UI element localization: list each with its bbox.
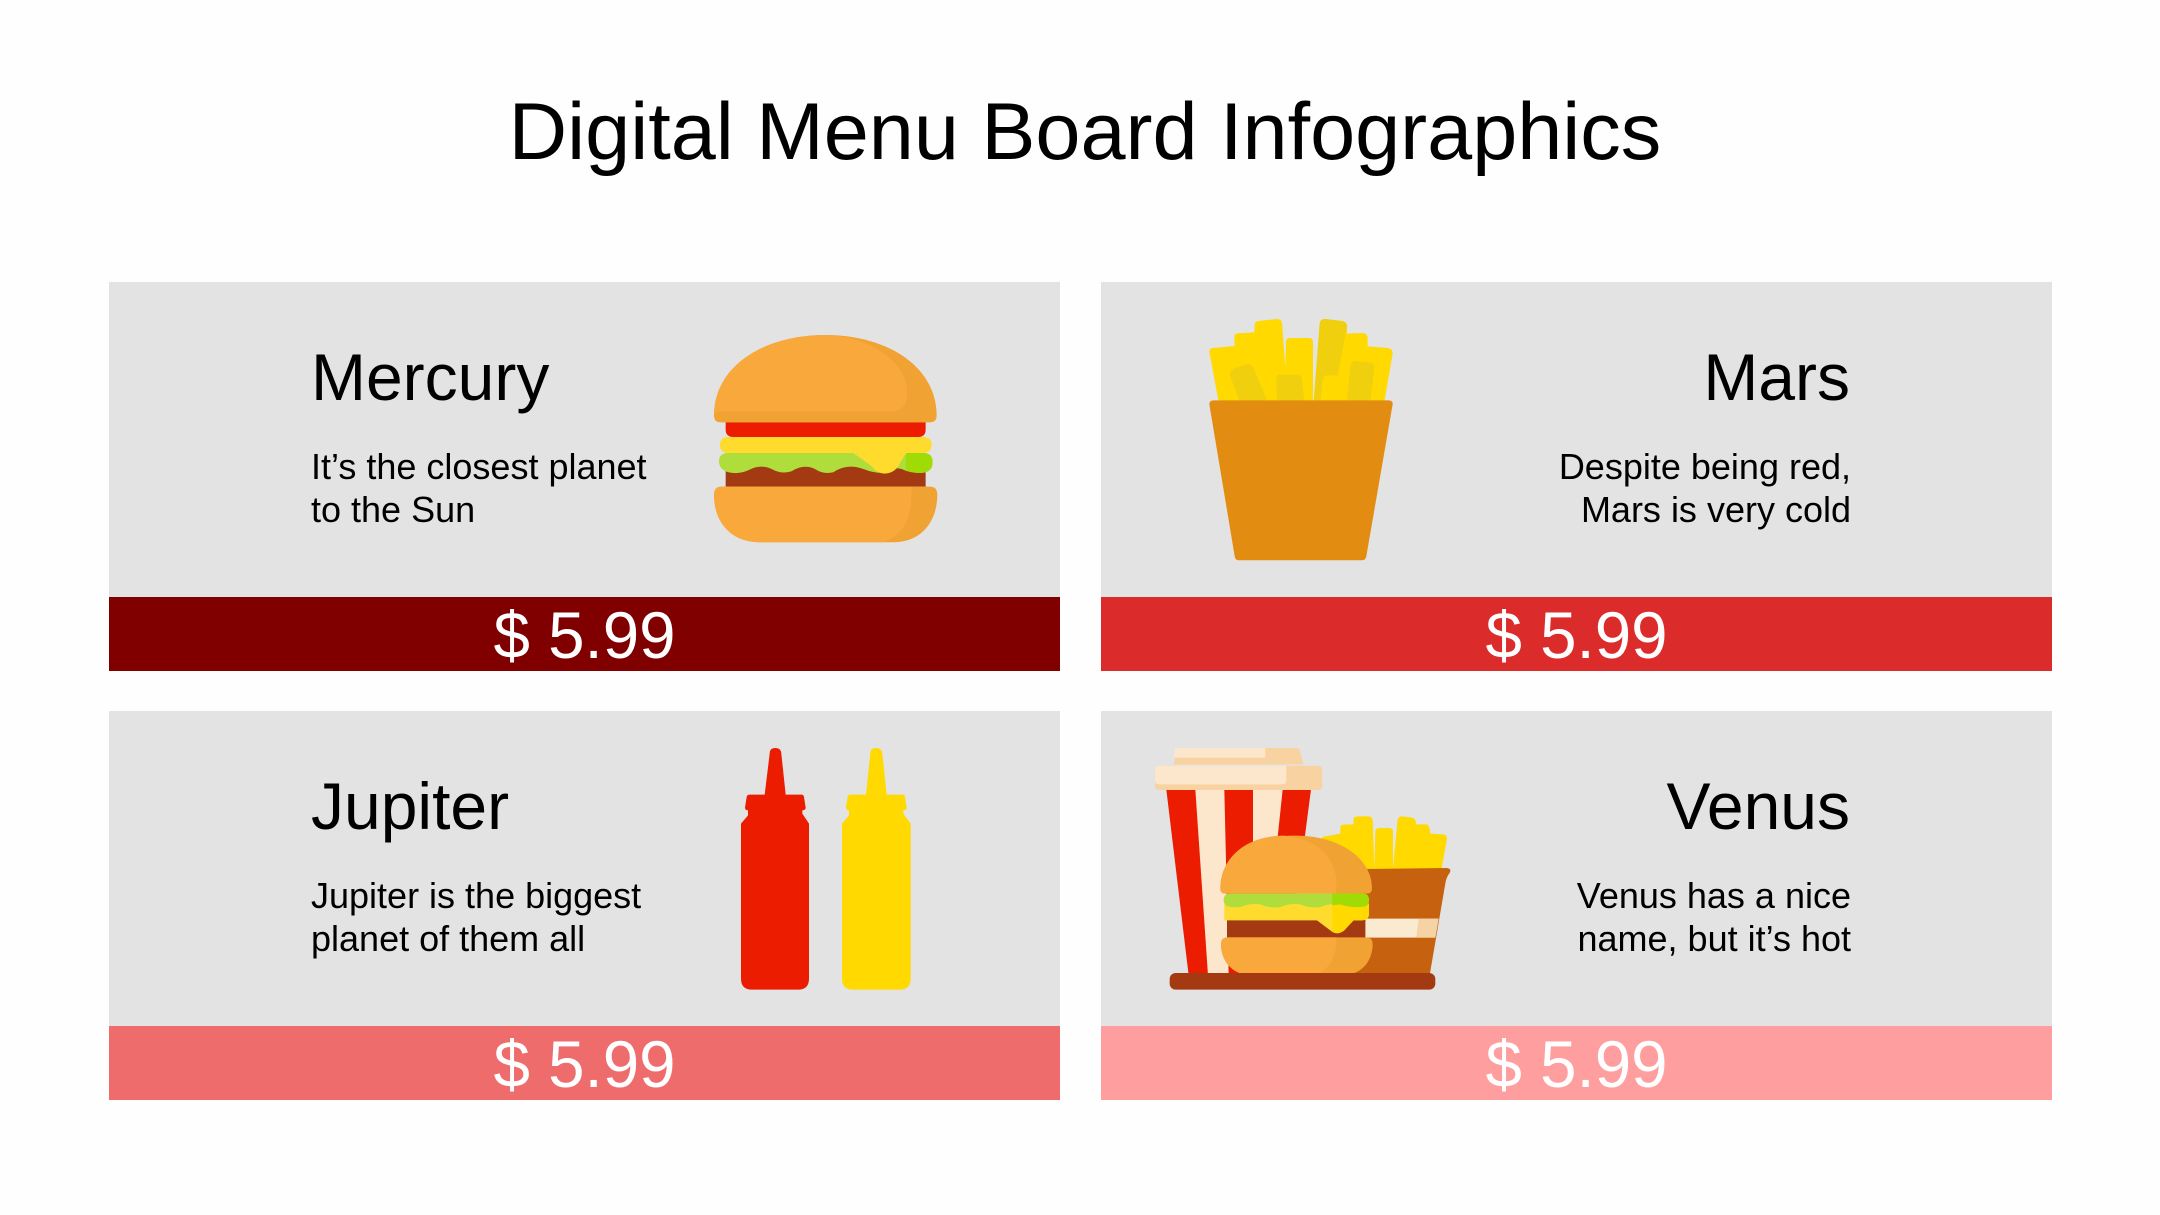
price bar: [109, 1026, 1060, 1100]
heading: Jupiter: Jupiter: [311, 769, 509, 843]
icon: hamburger: [714, 335, 938, 542]
icon: mustard bottle: [842, 748, 911, 989]
price bar: [1101, 1026, 2052, 1100]
fries box: [1322, 816, 1450, 975]
price bar: [109, 597, 1060, 671]
text: Jupiter description: planet of them all: [311, 918, 585, 959]
heading: Venus: Venus: [1666, 769, 1850, 843]
panel: Jupiter: [109, 711, 1060, 1100]
text: Mars description: Despite being red,: [1559, 446, 1851, 487]
panel: Mercury: [109, 282, 1060, 671]
soda cup: [1155, 748, 1322, 975]
price bar: $ 5.99: [493, 599, 676, 672]
text: Jupiter description: Jupiter is the biggest: [311, 875, 641, 916]
price bar: $ 5.99: [1485, 1028, 1668, 1101]
text: Mercury description: [311, 446, 647, 530]
icon: ketchup and mustard bottles: [741, 748, 911, 990]
tray: [1169, 973, 1435, 989]
text: Jupiter description: [311, 875, 641, 959]
text: Mars description: [1559, 446, 1851, 530]
icon: burger, fries and drink combo: [1155, 748, 1450, 990]
icon: french fries: [1209, 319, 1393, 560]
price bar: [1101, 597, 2052, 671]
panel: Mars: [1101, 282, 2052, 671]
text: Mercury description: It’s the closest planet: [311, 446, 647, 487]
text: Venus description: [1576, 875, 1851, 959]
heading: Mars: Mars: [1703, 340, 1850, 414]
title: Digital Menu Board Infographics: [509, 87, 1661, 177]
burger: [1220, 835, 1372, 975]
price bar: $ 5.99: [493, 1028, 676, 1101]
text: Mercury description: to the Sun: [311, 489, 475, 530]
panel: Venus: [1101, 711, 2052, 1100]
text: Mars description: Mars is very cold: [1581, 489, 1851, 530]
price bar: $ 5.99: [1485, 599, 1668, 672]
heading: Mercury: Mercury: [311, 340, 549, 414]
text: Venus description: Venus has a nice: [1577, 875, 1851, 916]
text: Venus description: name, but it’s hot: [1578, 918, 1851, 959]
icon: ketchup bottle: [741, 748, 809, 989]
